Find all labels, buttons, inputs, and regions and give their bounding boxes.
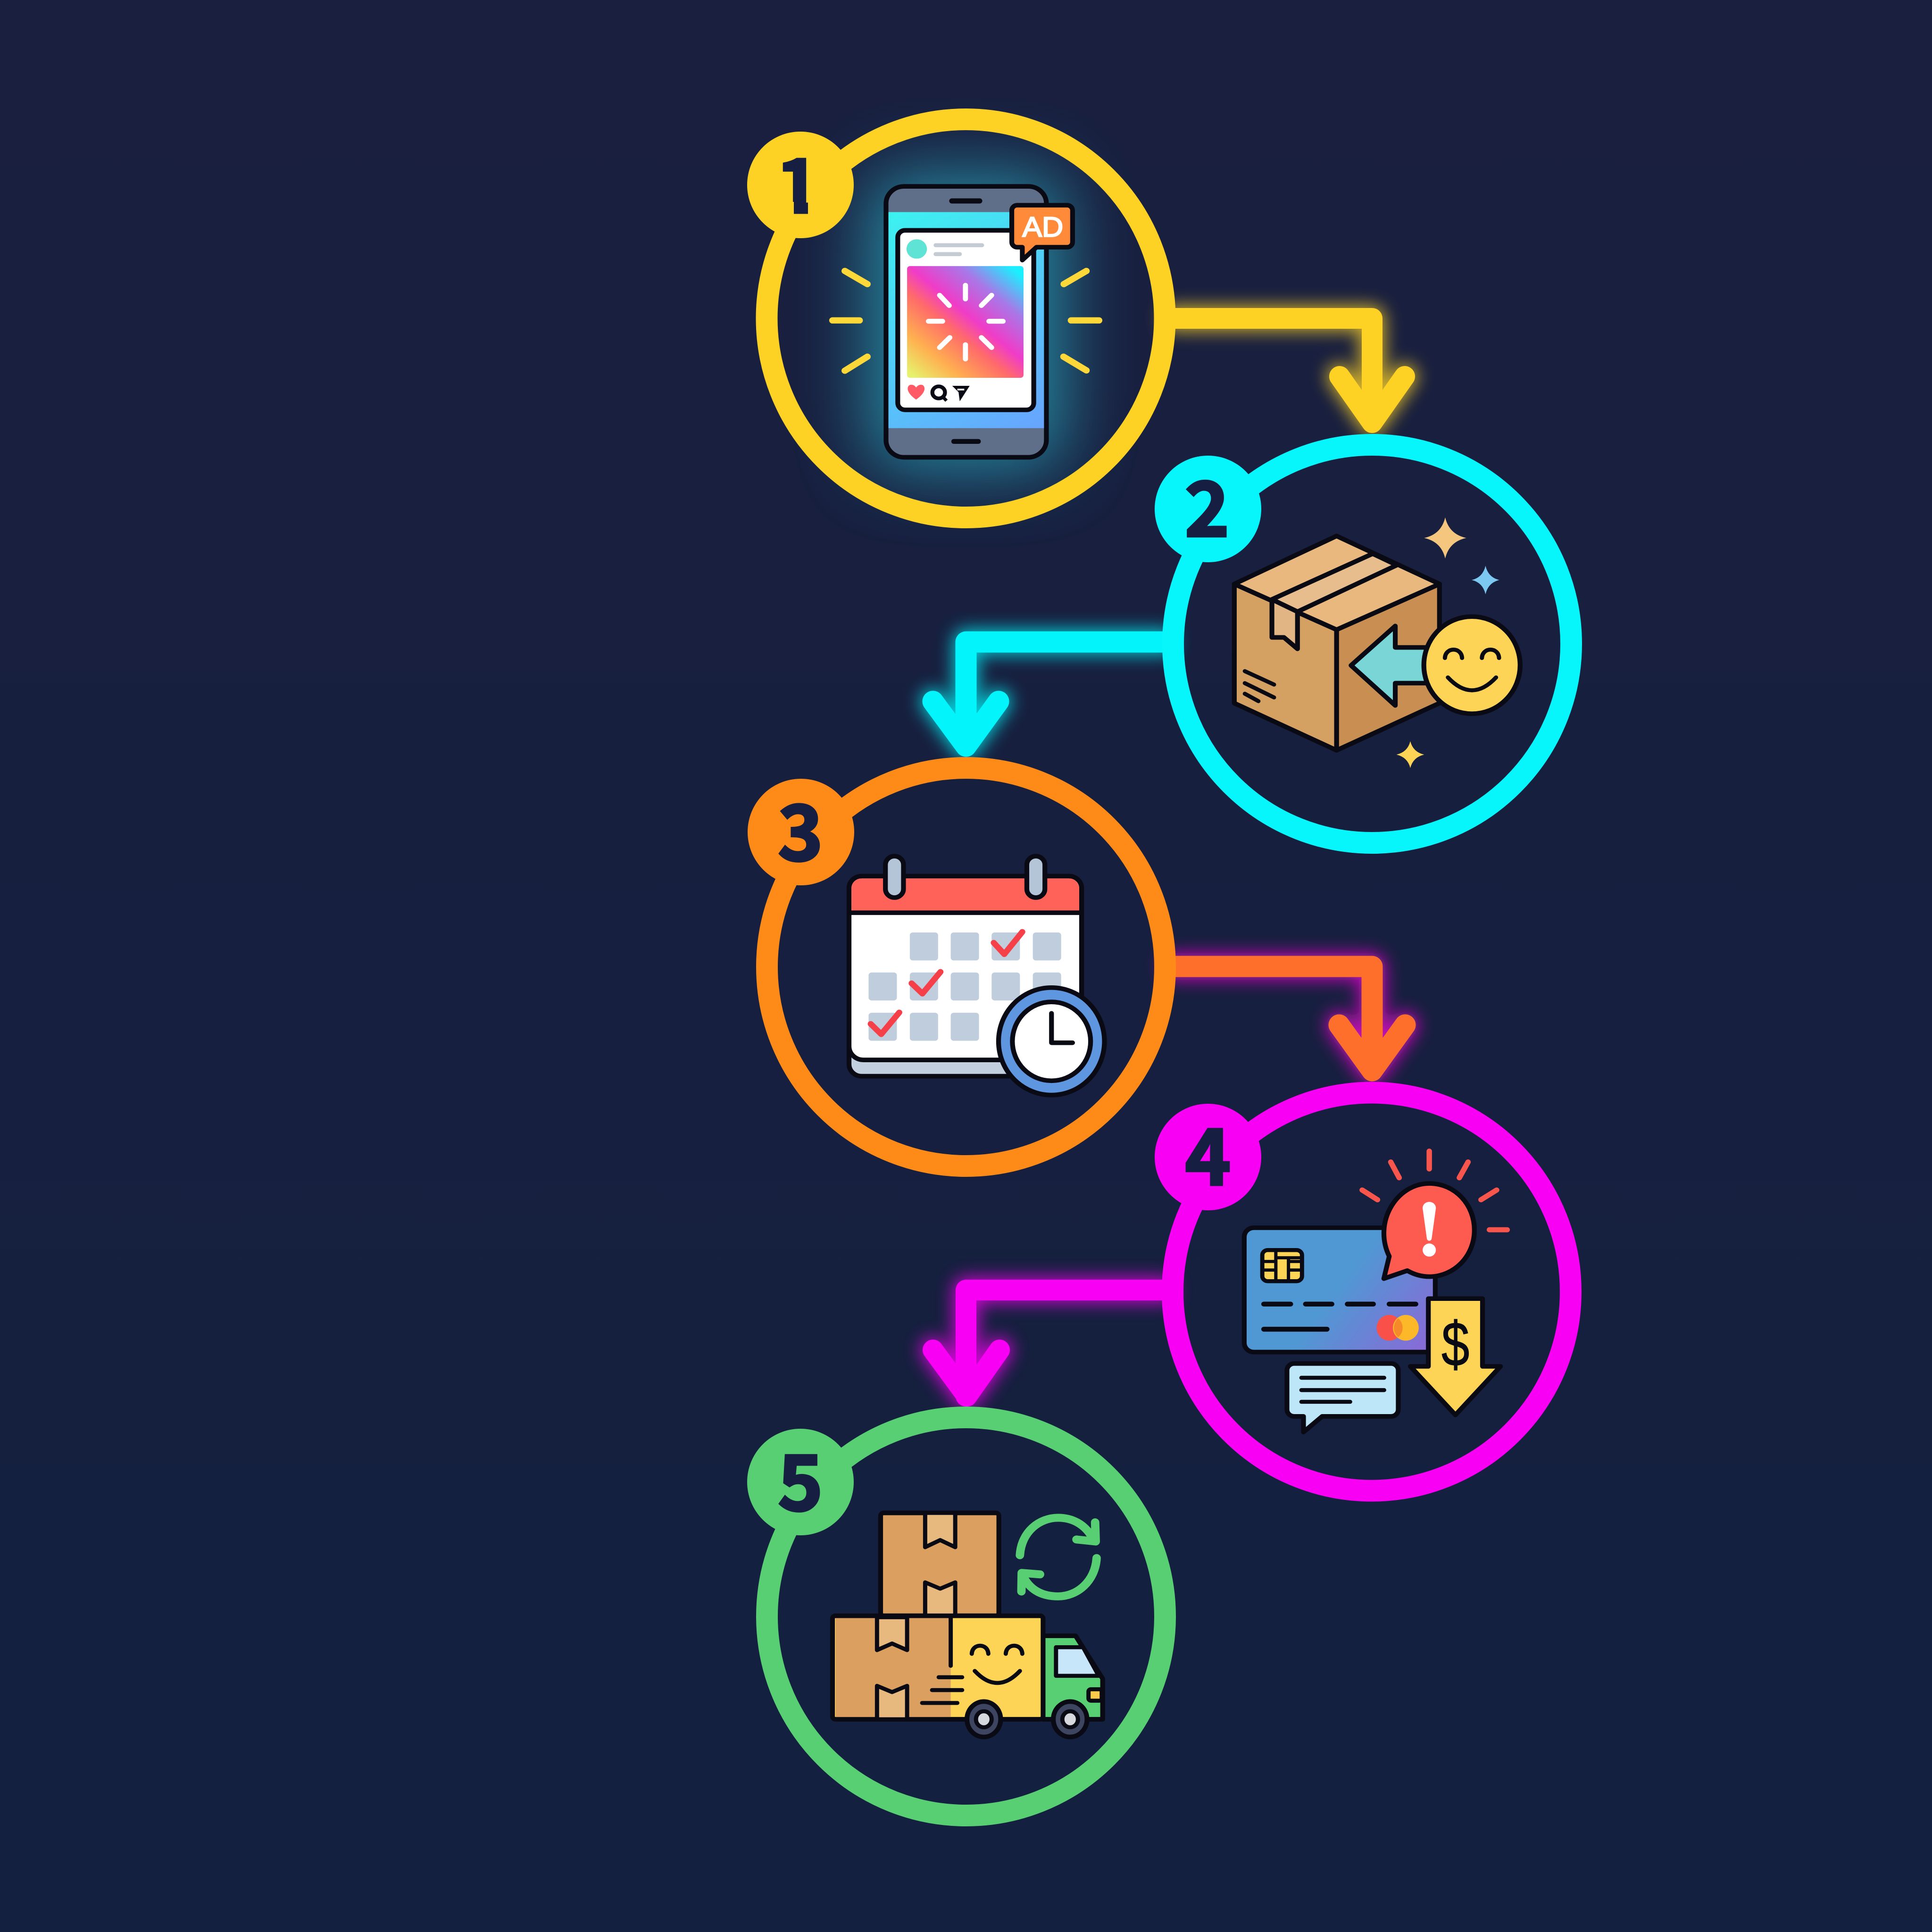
- panel: step 4 card payment alert: [1155, 1092, 1571, 1491]
- check marks: [871, 932, 1022, 1034]
- truck cargo and bottom box: [833, 1616, 1043, 1719]
- step 3 number badge: 3: [778, 772, 823, 883]
- step 1 number badge: 1: [776, 126, 820, 234]
- step 2 number badge: [1155, 449, 1261, 562]
- arrow: step 1 to step 2: [1174, 318, 1405, 423]
- arrow: step 3 to step 4: [1174, 966, 1405, 1071]
- step 2 ring: [1173, 445, 1571, 843]
- top box: [881, 1513, 999, 1616]
- cardboard box: [1234, 536, 1440, 750]
- arrow: step 2 to step 3: [933, 642, 1163, 746]
- panel: step 2 package received: [1155, 445, 1571, 843]
- panel: step 3 calendar and clock: [748, 768, 1165, 1166]
- alert bubble: [1384, 1183, 1474, 1279]
- step 4 ring: [1173, 1092, 1571, 1491]
- truck smile: [972, 1646, 1022, 1683]
- speed lines: [922, 1677, 962, 1703]
- calendar rings: [885, 856, 1045, 898]
- icon: calendar with clock: [849, 856, 1105, 1095]
- icon: phone with social post and ad: [833, 186, 1099, 457]
- attention rays: [833, 271, 1099, 371]
- step 1 number badge: [747, 126, 854, 238]
- AD speech bubble: AD: [1022, 211, 1063, 242]
- step 2 number badge: 2: [1185, 449, 1229, 558]
- alert rays: [1362, 1151, 1507, 1230]
- sparkles: [1397, 517, 1499, 768]
- step 1 ring: [767, 119, 1165, 517]
- message bubble: [1287, 1364, 1398, 1432]
- arrow: step 4 to step 5: [933, 1290, 1163, 1396]
- credit card: [1244, 1228, 1435, 1352]
- repeat arrows: [1020, 1518, 1097, 1596]
- down arrow with dollar sign: [1410, 1299, 1500, 1415]
- step 4 number badge: 4: [1185, 1096, 1231, 1208]
- step 5 number badge: [747, 1422, 854, 1535]
- arrow into box: [1351, 626, 1430, 706]
- icon: parcel with smiley and arrow: [1234, 517, 1520, 768]
- icon: boxes on delivery truck with repeat arrows: [833, 1513, 1103, 1737]
- panel: step 5 repeat delivery: [747, 1417, 1165, 1815]
- phone body: [886, 186, 1046, 457]
- phone glow: [868, 175, 1064, 469]
- icon: credit card, alert, refund and message: [1244, 1151, 1507, 1432]
- down arrow with dollar sign: $: [1441, 1309, 1469, 1379]
- step 5 ring: [767, 1417, 1165, 1815]
- wheels: [967, 1701, 1087, 1737]
- step 3 number badge: [748, 772, 854, 885]
- step 3 ring: [767, 768, 1165, 1166]
- social post card: [898, 230, 1034, 410]
- smiley face: [1424, 616, 1520, 714]
- panel: step 1 advert on phone: [747, 119, 1165, 517]
- step 5 number badge: 5: [778, 1422, 823, 1532]
- calendar page: [849, 876, 1082, 1076]
- clock: [999, 988, 1105, 1095]
- AD speech bubble: [1012, 205, 1073, 260]
- step 4 number badge: [1155, 1096, 1261, 1210]
- truck cab: [1043, 1636, 1103, 1719]
- day cells: [868, 933, 1061, 1041]
